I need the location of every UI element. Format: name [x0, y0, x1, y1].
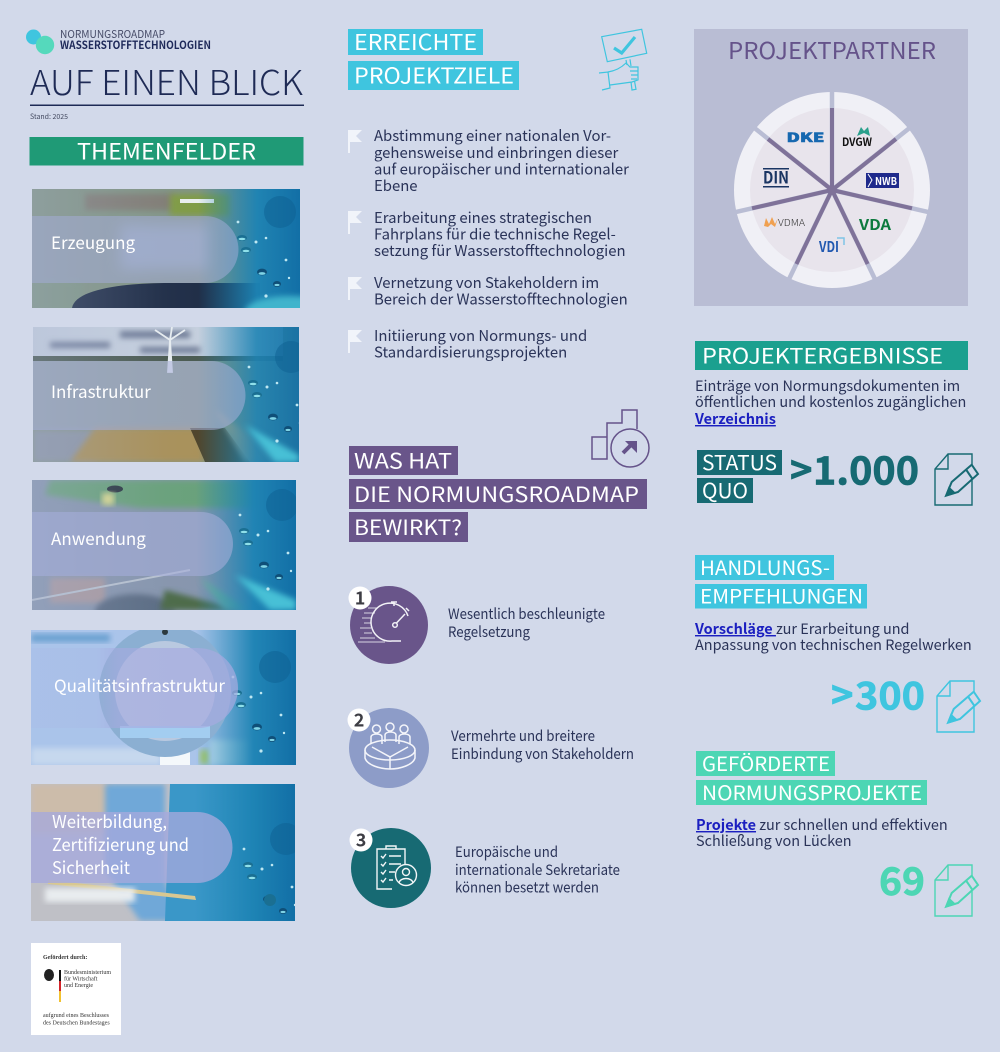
goal 4: Initiierung von Normungs- und: [374, 325, 587, 346]
icon: stopwatch: [358, 602, 409, 642]
theme card: Qualitätsinfrastruktur: Qualitätsinfrastruktur: [54, 672, 225, 697]
text: Einträge von Normungsdokumenten: Einträge von Normungsdokumenten im: [695, 375, 960, 396]
text: Einträge von Normungsdokumenten: Verzeichnis: [694, 408, 776, 429]
icon: German flag bar: [59, 970, 61, 1002]
funding logo: für Wirtschaft: [64, 976, 98, 982]
theme card: Erzeugung: [32, 189, 300, 308]
logo: NWB: NWB: [875, 174, 897, 189]
heading: Was hat die Normungsroadmap bewirkt?: DIE NORMUNGSROADMAP: [354, 479, 639, 509]
title: Stand: 2025: [30, 112, 68, 122]
goal 2: setzung für Wasserstofftechnologien: [374, 240, 626, 261]
number: more than 300: >: [831, 665, 853, 720]
theme card: Weiterbildung, Zertifizierung und Sicherheit: Sicherheit: [52, 855, 130, 880]
funding logo: des Deutschen Bundestages: [43, 1020, 110, 1026]
effect 2: [348, 706, 634, 788]
number: 69: 69: [879, 851, 925, 906]
pill: Infrastruktur: [33, 361, 246, 430]
number: more than 300: 300: [855, 666, 925, 720]
icon: document with pencil (mint): [935, 865, 978, 916]
effect 3: [350, 826, 620, 908]
heading: Handlungsempfehlungen: EMPFEHLUNGEN: [700, 580, 863, 610]
number: more than 1.000: 1.000: [813, 440, 919, 496]
logo: DVGW: DVGW: [842, 134, 872, 150]
badge 1: [348, 584, 372, 610]
list: project goals: [348, 125, 629, 362]
heading: Was hat die Normungsroadmap bewirkt?: BEWIRKT?: [354, 512, 462, 542]
heading: Was hat die Normungsroadmap bewirkt?: [349, 446, 647, 542]
icon: document with pencil (cyan): [937, 681, 980, 732]
logo: VDI: VDI: [818, 236, 839, 257]
icon: round table with people: [365, 723, 415, 769]
text: Vorschläge: Anpassung von technischen Regelwerken: [695, 634, 972, 655]
goal 2: Erarbeitung eines strategischen: [374, 207, 592, 228]
heading: Erreichte Projektziele: [348, 26, 519, 90]
logo: VDA: VDA: [858, 214, 891, 235]
icon: hand holding check sign: [599, 29, 647, 90]
logo: Normungsroadmap Wasserstofftechnologien: NORMUNGSROADMAP: [60, 26, 165, 42]
heading: Handlungsempfehlungen: HANDLUNGS-: [700, 552, 830, 581]
effect 2: Einbindung von Stakeholdern: [451, 743, 634, 764]
goal 1: auf europäischer und internationaler: [374, 158, 629, 180]
heading: Erreichte Projektziele: PROJEKTZIELE: [354, 60, 514, 90]
badge 1: 1: [355, 584, 365, 610]
heading: Themenfelder: THEMENFELDER: [77, 134, 256, 166]
effect 1: [348, 584, 605, 664]
logo: DVGW: [842, 127, 872, 150]
goal 2: [348, 207, 626, 261]
funding logo: [31, 943, 121, 1035]
text: Einträge von Normungsdokumenten: öffentlichen und kostenlos zugänglichen: [695, 391, 966, 412]
heading: Handlungsempfehlungen: [695, 552, 867, 610]
effect 3: Europäische und: [455, 841, 558, 862]
badge 3: [350, 826, 372, 852]
effect 3: können besetzt werden: [455, 876, 599, 898]
theme card: Infrastruktur: Infrastruktur: [51, 378, 151, 403]
text: Einträge von Normungsdokumenten: [694, 375, 966, 429]
theme card: Anwendung: [32, 480, 296, 610]
goal 1: gehensweise und einbringen dieser: [374, 142, 618, 163]
effect 1: Regelsetzung: [448, 621, 530, 642]
theme card: Weiterbildung, Zertifizierung und Sicherheit: [31, 784, 302, 925]
heading: Geförderte Normungsprojekte: NORMUNGSPROJEKTE: [702, 777, 922, 806]
icon: checklist with person: [377, 846, 416, 889]
icon: document with pencil (teal): [935, 454, 978, 505]
heading: Themenfelder: [30, 134, 304, 166]
badge 3: 3: [356, 826, 366, 852]
number: more than 1.000: >: [790, 440, 812, 495]
label: Status quo: STATUS: [702, 446, 777, 476]
goal 3: [348, 272, 628, 310]
goal 3: Vernetzung von Stakeholdern im: [374, 272, 599, 293]
goal 3: Bereich der Wasserstofftechnologien: [374, 288, 628, 310]
logo: Normungsroadmap Wasserstofftechnologien: WASSERSTOFFTECHNOLOGIEN: [60, 37, 211, 53]
theme card: Weiterbildung, Zertifizierung und Sicherheit: Weiterbildung,: [52, 809, 167, 834]
effect 3: internationale Sekretariate: [455, 859, 620, 880]
label: Status quo: QUO: [702, 474, 748, 504]
text: Vorschläge: Vorschläge zur Erarbeitung und: [694, 618, 910, 639]
text: Projekte: Projekte zur schnellen und effektiven: [696, 814, 948, 835]
funding logo: und Energie: [64, 983, 93, 989]
logo: DKE: DKE: [786, 127, 825, 146]
badge 2: [348, 706, 370, 732]
funding logo: Gefördert durch:: [43, 955, 87, 961]
goal 1: Ebene: [374, 175, 418, 196]
effect 1: Wesentlich beschleunigte: [448, 603, 605, 624]
logo: Normungsroadmap Wasserstofftechnologien: [26, 26, 211, 54]
logo: VDMA: VDMA: [778, 215, 805, 229]
funding logo: Bundesministerium: [64, 970, 111, 976]
goal 1: Abstimmung einer nationalen Vor-: [374, 125, 611, 146]
pill: Erzeugung: [32, 216, 238, 283]
goal 4: Standardisierungsprojekten: [374, 342, 567, 362]
heading: Was hat die Normungsroadmap bewirkt?: WAS HAT: [354, 446, 452, 476]
theme card: Erzeugung: Erzeugung: [51, 229, 135, 254]
icon: federal eagle: [44, 969, 54, 981]
theme card: Anwendung: Anwendung: [51, 525, 146, 550]
heading: Geförderte Normungsprojekte: [696, 748, 927, 806]
badge 2: 2: [354, 706, 364, 732]
wheel chart of partners: [734, 90, 930, 288]
wind turbine: [155, 327, 185, 372]
pill: Weiterbildung: [31, 812, 232, 883]
panel: Projektpartner: PROJEKTPARTNER: [728, 32, 936, 66]
goal 1: [348, 125, 629, 196]
theme card: Weiterbildung, Zertifizierung und Sicherheit: Zertifizierung und: [52, 832, 189, 857]
pill: Anwendung: [32, 512, 233, 576]
logo: DIN: DIN: [763, 164, 789, 188]
heading: Geförderte Normungsprojekte: GEFÖRDERTE: [702, 748, 830, 777]
goal 4: [348, 325, 587, 362]
logo: NWB: [866, 173, 899, 189]
logo: VDMA: [764, 215, 805, 229]
panel: Projektpartner: [694, 29, 968, 306]
goal 2: Fahrplans für die technische Regel-: [374, 224, 616, 244]
pill: Qualitätsinfrastruktur: [31, 648, 238, 728]
effect 2: Vermehrte und breitere: [451, 725, 595, 746]
theme card: Qualitätsinfrastruktur: [31, 625, 296, 765]
text: Projekte: Schließung von Lücken: [696, 830, 852, 851]
title: AUF EINEN BLICK: [30, 56, 303, 105]
text: Projekte: [696, 814, 948, 851]
heading: Projektergebnisse: PROJEKTERGEBNISSE: [702, 340, 943, 370]
theme card: Infrastruktur: [33, 327, 307, 462]
funding logo: aufgrund eines Beschlusses: [43, 1012, 110, 1019]
label: Status quo: [697, 446, 782, 504]
icon: bar chart with arrow: [592, 410, 649, 467]
text: Vorschläge: [694, 618, 972, 655]
heading: Erreichte Projektziele: ERREICHTE: [354, 26, 477, 57]
